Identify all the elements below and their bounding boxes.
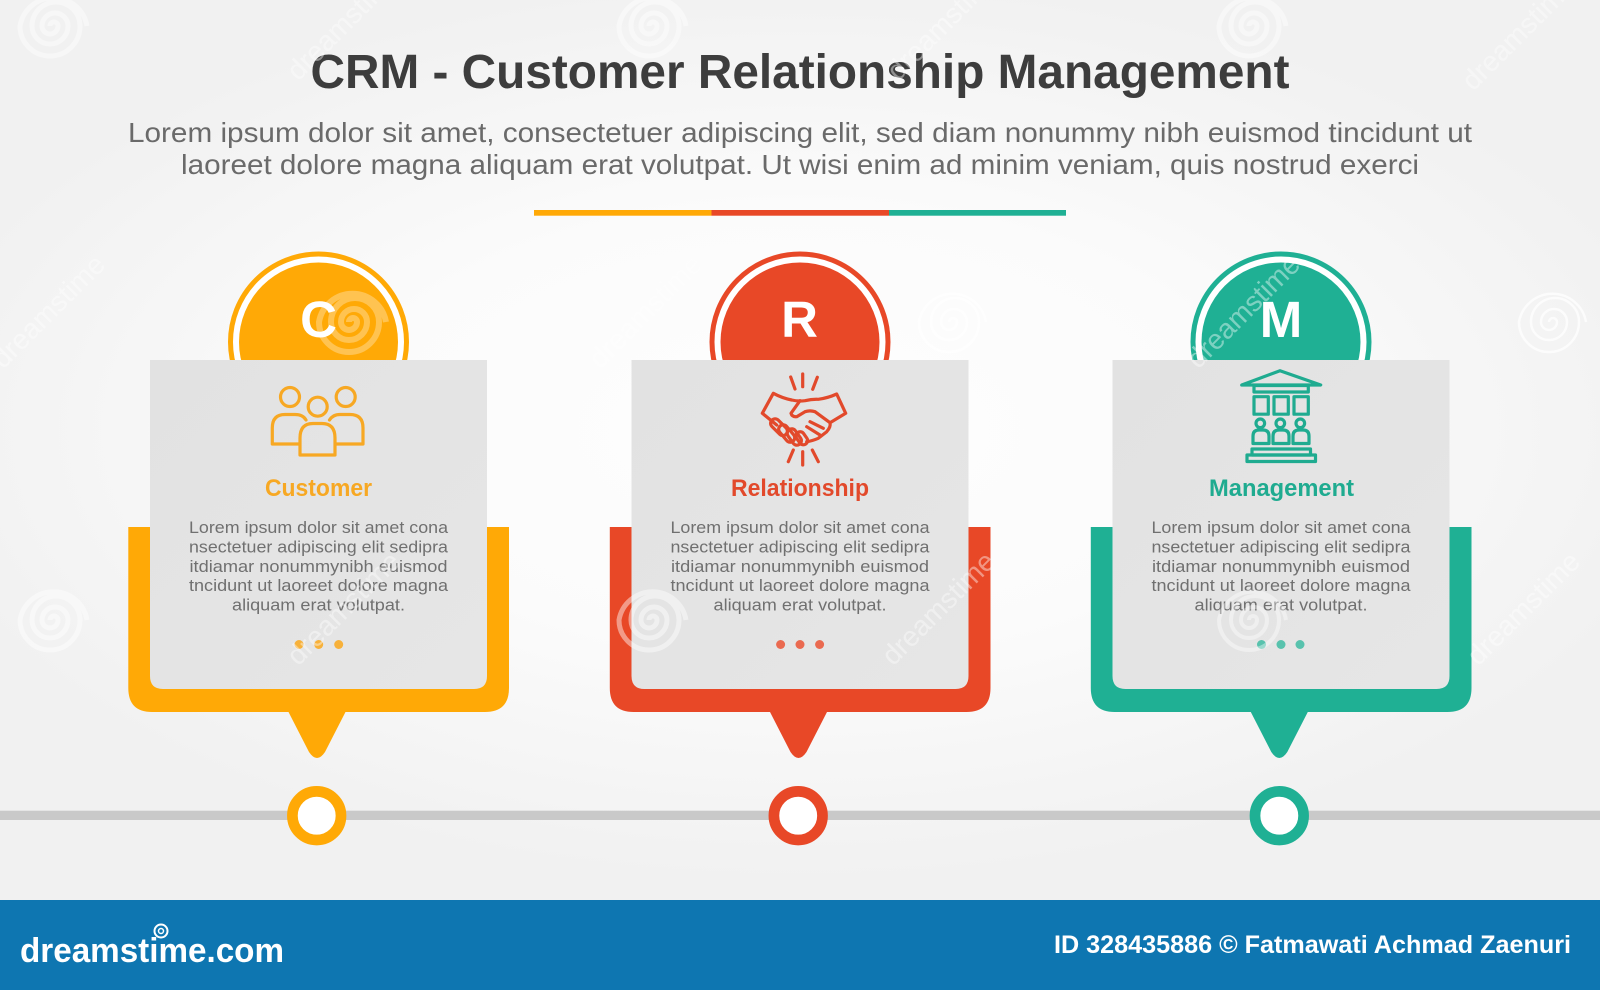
badge: M xyxy=(1193,254,1369,430)
body text: tncidunt ut laoreet dolore magna xyxy=(670,576,930,595)
watermark overlay: dreamstime xyxy=(1461,546,1586,671)
logo: dreamstime.com xyxy=(20,932,284,970)
timeline node xyxy=(774,791,822,840)
dots xyxy=(294,640,343,649)
watermark overlay: dreamstime xyxy=(876,546,1001,671)
credit: ID 328435886 © Fatmawati Achmad Zaenuri xyxy=(1054,931,1571,959)
watermark overlay xyxy=(0,0,1586,671)
title: CRM - Customer Relationship Management xyxy=(310,46,1290,99)
badge: R: R xyxy=(781,291,818,348)
card xyxy=(1112,360,1450,689)
badge: R xyxy=(712,254,888,430)
body text xyxy=(189,518,449,614)
heading: relationship: Relationship xyxy=(731,475,869,502)
icon: handshake xyxy=(762,374,846,465)
panel: management xyxy=(1091,254,1472,840)
card xyxy=(150,360,487,689)
watermark overlay: dreamstime xyxy=(281,546,406,671)
dots xyxy=(776,640,824,649)
body text: aliquam erat volutpat. xyxy=(232,596,405,614)
body text: aliquam erat volutpat. xyxy=(714,596,886,614)
body text: Lorem ipsum dolor sit amet cona xyxy=(1152,518,1411,537)
body text: nsectetuer adipiscing elit sedipra xyxy=(1152,538,1411,556)
card xyxy=(632,360,968,689)
body text xyxy=(670,518,930,614)
body text: itdiamar nonummynibh euismod xyxy=(190,557,448,576)
bracket with pointer xyxy=(128,527,509,758)
tricolor divider xyxy=(534,210,1066,216)
footer banner xyxy=(0,900,1600,990)
watermark overlay: dreamstime xyxy=(1181,249,1306,374)
body text: tncidunt ut laoreet dolore magna xyxy=(1152,576,1411,595)
body text: itdiamar nonummynibh euismod xyxy=(1152,557,1410,576)
heading: customer: Customer xyxy=(265,475,372,502)
timeline node xyxy=(292,791,341,840)
panel: customer xyxy=(128,254,509,840)
body text: itdiamar nonummynibh euismod xyxy=(671,557,929,576)
body text: tncidunt ut laoreet dolore magna xyxy=(189,576,449,595)
subtitle: laoreet dolore magna aliquam erat volutpat. Ut wisi enim ad minim veniam, quis nostrud exerci xyxy=(181,149,1419,180)
timeline node xyxy=(1255,791,1304,840)
watermark overlay: dreamstime xyxy=(583,249,708,374)
body text: aliquam erat volutpat. xyxy=(1194,596,1368,614)
dots xyxy=(1257,640,1304,649)
badge: C xyxy=(230,254,406,430)
icon: building with people xyxy=(1242,371,1321,462)
watermark overlay: background layer xyxy=(20,0,1586,650)
body text: Lorem ipsum dolor sit amet cona xyxy=(189,518,449,537)
body text xyxy=(1152,518,1411,614)
icon: people xyxy=(272,388,363,455)
panel: relationship xyxy=(610,254,990,840)
body text: nsectetuer adipiscing elit sedipra xyxy=(670,538,930,556)
bracket with pointer xyxy=(1091,527,1472,758)
subtitle: Lorem ipsum dolor sit amet, consectetuer adipiscing elit, sed diam nonummy nibh euismod tincidunt ut xyxy=(128,117,1472,148)
heading: management: Management xyxy=(1209,475,1354,502)
body text: nsectetuer adipiscing elit sedipra xyxy=(189,538,449,556)
body text: Lorem ipsum dolor sit amet cona xyxy=(670,518,930,537)
bracket with pointer xyxy=(610,527,990,758)
subtitle xyxy=(128,117,1472,180)
timeline line xyxy=(0,811,1600,820)
badge: C: C xyxy=(300,291,337,348)
badge: M: M xyxy=(1260,291,1302,348)
